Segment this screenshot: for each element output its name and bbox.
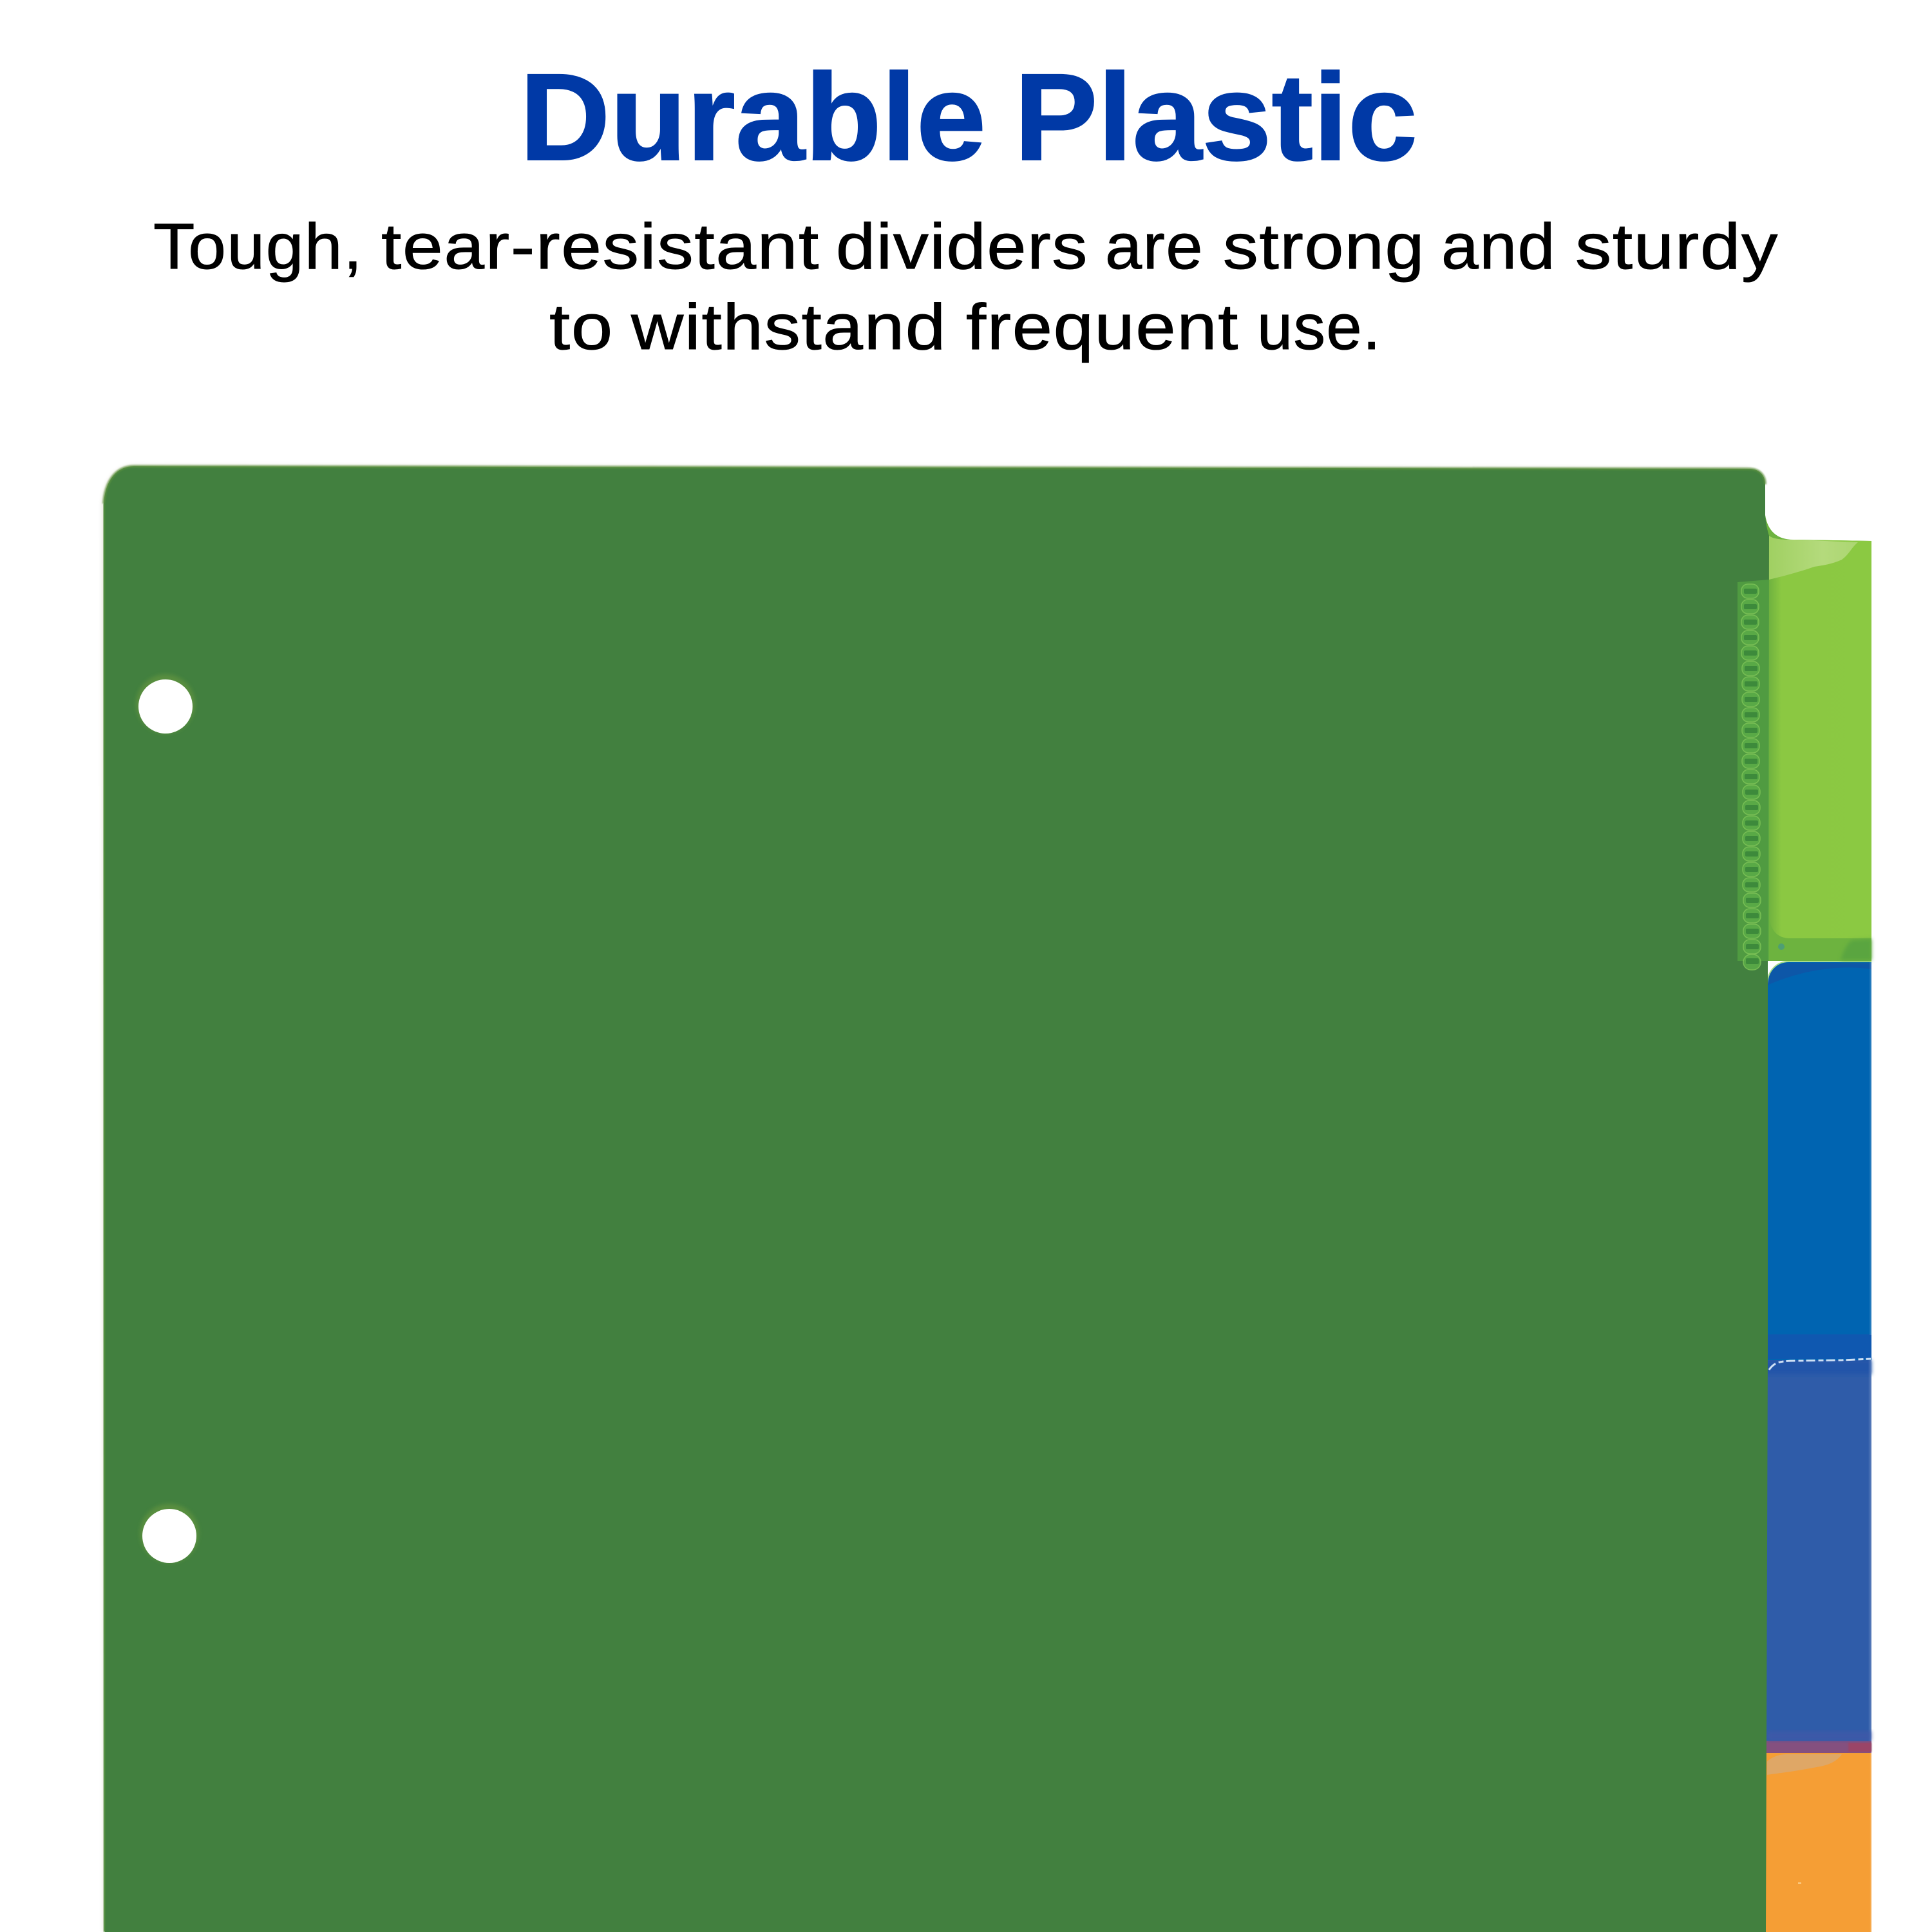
subtitle [153,211,1779,363]
panel: main green divider [102,465,1769,1932]
subtitle: and [1441,211,1556,283]
subtitle: to [549,291,614,363]
icon: binder hole lower [140,1504,199,1563]
subtitle: are [1105,211,1204,283]
tab: orange [1758,1741,1871,1932]
icon: binder hole upper [136,674,195,734]
subtitle: tear-resistant [381,211,820,283]
subtitle: strong [1223,211,1425,283]
subtitle: withstand [630,291,947,363]
subtitle: Tough, [153,211,363,283]
title: Plastic [1014,48,1417,186]
title [520,48,1417,186]
perforated tab strip [1738,580,1785,970]
title: Durable [520,48,986,186]
subtitle: dividers [836,211,1088,283]
subtitle: frequent [966,291,1239,363]
tab: blue [1767,961,1871,1370]
subtitle: sturdy [1575,211,1779,283]
tab: indigo [1758,1359,1871,1741]
subtitle: use. [1257,291,1381,363]
panel: divider tabs stack [1739,515,1871,1932]
tab: light green [1739,515,1871,961]
